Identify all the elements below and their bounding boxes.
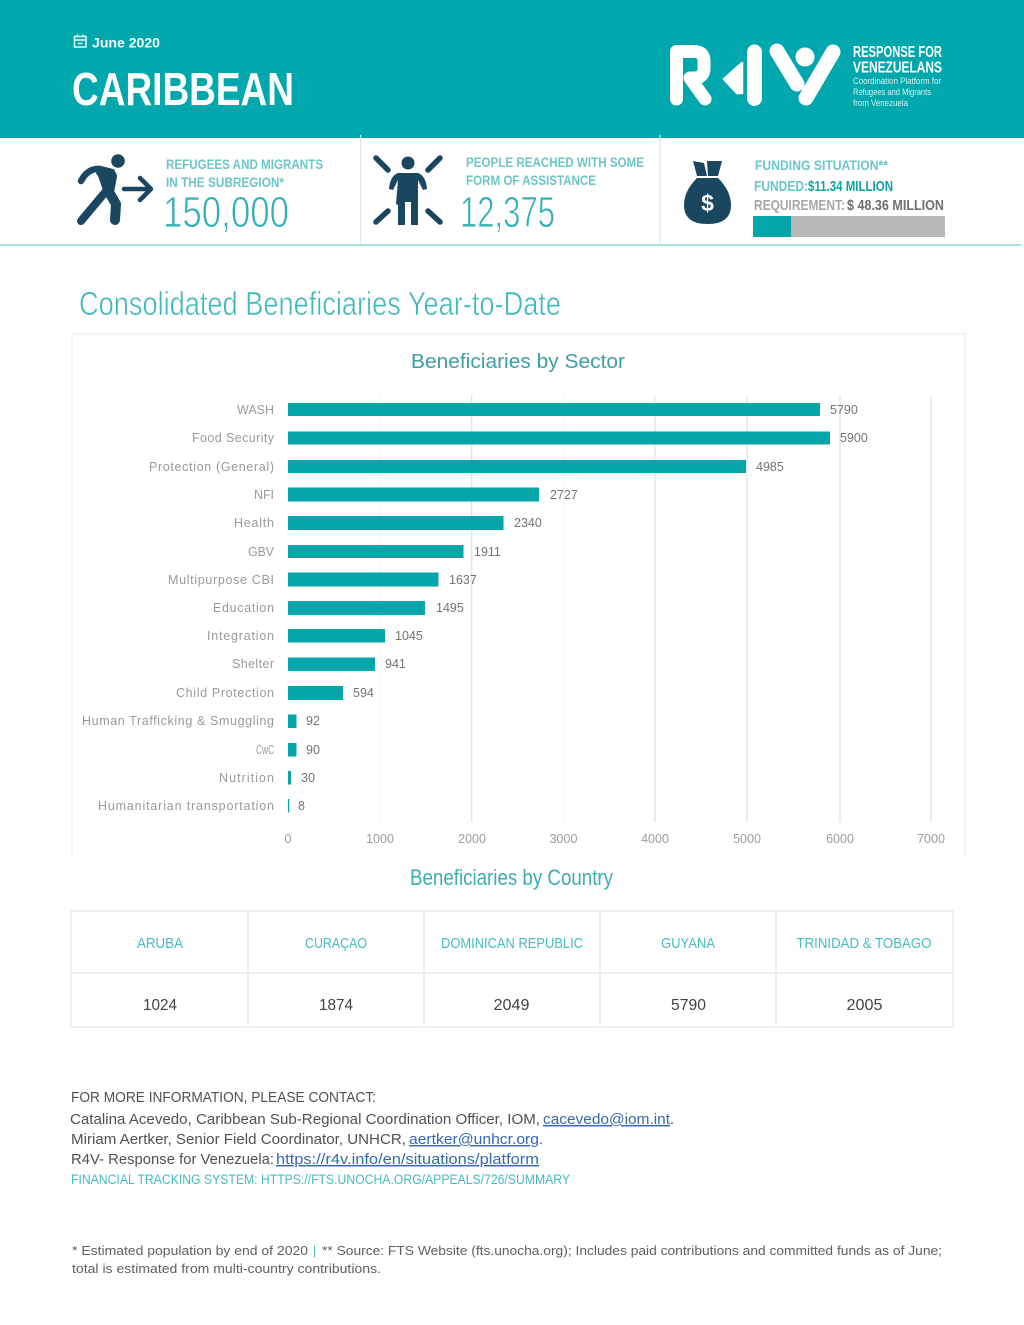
footnote: ** Source: FTS Website (fts.unocha.org); Includes paid contributions and committed funds as of June; (322, 1244, 942, 1258)
category labels: Multipurpose CBI (168, 573, 274, 587)
icon: person reached (376, 156, 440, 225)
bars (288, 403, 830, 812)
contact information: https://r4v.info/en/situations/platform (276, 1152, 539, 1168)
x axis ticks: 4000 (641, 832, 669, 846)
logo text: Coordination Platform for (853, 76, 941, 87)
contact information: cacevedo@iom.int (543, 1112, 670, 1128)
country values: 1874 (319, 997, 353, 1014)
kpi: funding situation: $11.34 MILLION (808, 179, 893, 195)
contact information: Catalina Acevedo, Caribbean Sub-Regional Coordination Officer, IOM, (70, 1112, 540, 1128)
panel: beneficiaries by sector chart (72, 334, 965, 857)
country values: 2049 (494, 997, 530, 1014)
contact information: FINANCIAL TRACKING SYSTEM: HTTPS://FTS.UNOCHA.ORG/APPEALS/726/SUMMARY (71, 1172, 570, 1187)
heading: beneficiaries by country: Beneficiaries by Country (410, 865, 613, 890)
kpi: refugees and migrants (163, 157, 323, 237)
icon: money bag (684, 161, 731, 224)
value labels: 4985 (756, 460, 784, 474)
kpi: funding situation (753, 158, 945, 237)
country values: 1024 (143, 997, 177, 1014)
kpi: people reached: 12,375 (460, 188, 555, 237)
value labels: 594 (353, 686, 374, 700)
kpi: people reached (460, 155, 644, 237)
category labels: Health (234, 516, 274, 530)
kpi: funding situation: $ 48.36 MILLION (847, 198, 944, 214)
category labels: Humanitarian transportation (98, 799, 274, 813)
value labels: 2340 (514, 516, 542, 530)
kpi: funding situation: FUNDING SITUATION** (755, 158, 889, 173)
icon: money bag: $ (701, 190, 714, 216)
kpi: people reached: PEOPLE REACHED WITH SOME (466, 155, 644, 170)
chart title: Beneficiaries by Sector (411, 351, 625, 373)
x axis ticks (285, 832, 945, 846)
contact information: aertker@unhcr.org (409, 1132, 539, 1148)
value labels: 90 (306, 743, 320, 757)
category labels (82, 403, 275, 813)
kpi: people reached: FORM OF ASSISTANCE (466, 173, 596, 188)
footnote (72, 1244, 942, 1276)
category labels: CwC (256, 743, 274, 757)
kpi: funding situation: REQUIREMENT: (754, 198, 845, 214)
contact information: FOR MORE INFORMATION, PLEASE CONTACT: (71, 1090, 376, 1106)
country names: DOMINICAN REPUBLIC (441, 935, 583, 952)
value labels: 5790 (830, 403, 858, 417)
category labels: WASH (237, 403, 274, 417)
x axis ticks: 0 (285, 832, 292, 846)
x axis ticks: 7000 (917, 832, 945, 846)
country names: ARUBA (137, 935, 183, 952)
logo text: Refugees and Migrants (853, 87, 931, 98)
section heading: Consolidated Beneficiaries Year-to-Date (79, 285, 561, 322)
logo text (853, 44, 942, 109)
x axis ticks: 5000 (733, 832, 761, 846)
value labels: 5900 (840, 431, 868, 445)
category labels: Food Security (192, 431, 275, 445)
date: June 2020 (92, 34, 160, 50)
country names: GUYANA (661, 935, 715, 952)
contact information (70, 1090, 674, 1187)
icon: person moving (81, 154, 151, 221)
value labels: 1911 (474, 545, 501, 559)
contact information: R4V- Response for Venezuela: (71, 1152, 274, 1168)
logo text: from Venezuela (853, 98, 909, 109)
value labels: 8 (298, 799, 305, 813)
footnote: total is estimated from multi-country contributions. (72, 1262, 381, 1276)
funding progress bar (753, 216, 945, 237)
footnote: * Estimated population by end of 2020 (72, 1244, 308, 1258)
country values: 2005 (846, 997, 882, 1014)
kpi: funding situation: FUNDED: (754, 179, 808, 195)
category labels: Integration (207, 629, 274, 643)
logo text: RESPONSE FOR (853, 44, 942, 61)
x axis ticks: 6000 (826, 832, 854, 846)
country values: 5790 (671, 997, 706, 1014)
category labels: Human Trafficking & Smuggling (82, 714, 274, 728)
x axis ticks: 3000 (550, 832, 577, 846)
title: CARIBBEAN (72, 63, 294, 115)
value labels: 1637 (449, 573, 477, 587)
key figures strip (0, 135, 1021, 246)
contact information: Miriam Aertker, Senior Field Coordinator, UNHCR, (71, 1132, 406, 1148)
value labels: 2727 (550, 488, 578, 502)
header band (0, 0, 1024, 138)
country names: TRINIDAD & TOBAGO (796, 935, 932, 952)
icon: calendar (74, 34, 86, 47)
country names: CURAÇAO (305, 935, 367, 952)
category labels: NFI (254, 488, 274, 502)
footnote: | (313, 1244, 316, 1258)
kpi: refugees and migrants: 150,000 (163, 188, 289, 237)
logo text: VENEZUELANS (853, 60, 942, 76)
value labels: 30 (301, 771, 315, 785)
x axis ticks: 2000 (458, 832, 486, 846)
category labels: Education (213, 601, 274, 615)
value labels: 92 (306, 714, 320, 728)
contact information: . (539, 1132, 543, 1148)
category labels: Nutrition (219, 771, 274, 785)
category labels: Protection (General) (149, 460, 274, 474)
country values (143, 997, 882, 1014)
logo: R4V (676, 44, 942, 109)
kpi: refugees and migrants: IN THE SUBREGION* (166, 175, 285, 190)
category labels: Child Protection (176, 686, 274, 700)
value labels: 941 (385, 657, 406, 671)
category labels: Shelter (232, 657, 274, 671)
x axis ticks: 1000 (366, 832, 394, 846)
kpi: refugees and migrants: REFUGEES AND MIGRANTS (166, 157, 323, 172)
contact information: . (670, 1112, 674, 1128)
value labels (298, 403, 868, 813)
value labels: 1495 (436, 601, 464, 615)
value labels: 1045 (395, 629, 423, 643)
table: beneficiaries by country (71, 911, 953, 1027)
category labels: GBV (248, 545, 275, 559)
country names (137, 935, 932, 952)
